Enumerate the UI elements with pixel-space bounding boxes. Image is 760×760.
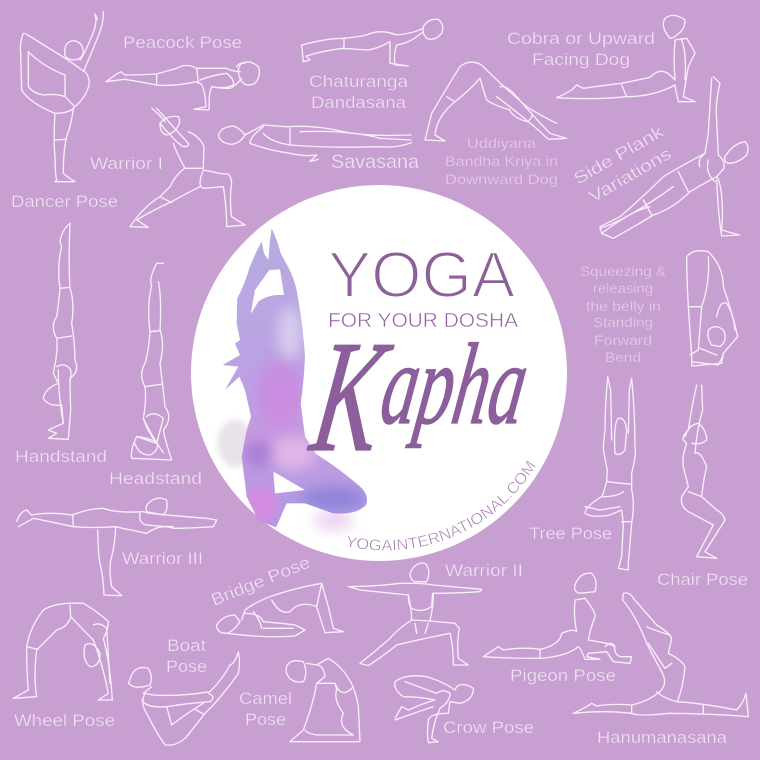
pose: peacock (106, 62, 259, 110)
pose: cobra (557, 15, 695, 102)
watercolor silhouette of seated yogi (218, 223, 373, 533)
pose: dancer (20, 12, 103, 182)
pose: hanumanasana (573, 593, 748, 717)
label: Crow Pose: Crow Pose (443, 718, 534, 737)
label: Pose (camel): Pose (245, 710, 286, 729)
label: Tree Pose: Tree Pose (529, 524, 612, 543)
label: Bridge Pose: Bridge Pose (208, 553, 313, 610)
label: Peacock Pose: Peacock Pose (123, 33, 242, 52)
script title: Kapha: K (301, 308, 401, 485)
central circle panel (191, 185, 567, 561)
label: Warrior II: Warrior II (445, 561, 523, 580)
label: Uddiyana: Uddiyana (467, 135, 536, 151)
pose: crow (395, 676, 473, 743)
label: Warrior III: Warrior III (122, 549, 203, 568)
pose: headstand (131, 263, 172, 460)
pose: standing forward bend (687, 251, 738, 366)
label: Chaturanga: Chaturanga (309, 72, 409, 91)
pose: boat (128, 652, 239, 745)
pose: bridge (217, 583, 343, 637)
pose: side plank (600, 77, 748, 238)
label: Handstand: Handstand (15, 447, 107, 466)
pose: chair (681, 385, 725, 558)
label: Headstand: Headstand (109, 469, 202, 488)
label: Cobra or Upward: Cobra or Upward (507, 29, 655, 48)
label: Savasana: Savasana (331, 152, 419, 173)
pose: wheel (13, 603, 112, 700)
label: Camel: Camel (239, 689, 292, 708)
pose: warrior II (348, 563, 482, 666)
pose: tree (585, 377, 635, 570)
label: Forward: Forward (594, 332, 652, 348)
label: releasing: releasing (593, 280, 653, 296)
label: Downward Dog: Downward Dog (445, 171, 558, 187)
pose: camel (286, 658, 360, 742)
pose: downward dog (425, 62, 567, 141)
label: Dancer Pose: Dancer Pose (11, 192, 118, 211)
label: Pose (boat): Pose (166, 657, 207, 676)
curved url: YOGAINTERNATIONAL.COM (348, 460, 536, 550)
pose: warrior III (17, 498, 217, 596)
label: Pigeon Pose: Pigeon Pose (510, 666, 616, 685)
label: Boat: Boat (167, 636, 206, 655)
label: Bandha Kriya in: Bandha Kriya in (445, 153, 558, 169)
script title: Kapha: apha (374, 321, 536, 449)
label: Warrior I: Warrior I (90, 154, 163, 173)
pose: chaturanga (302, 19, 443, 66)
pose: savasana (218, 125, 412, 162)
label: the belly in: the belly in (586, 298, 661, 314)
label: Bend: Bend (605, 349, 641, 365)
label: Variations: Variations (586, 144, 675, 206)
label: Side Plank: Side Plank (570, 122, 667, 188)
label: Chair Pose: Chair Pose (657, 570, 748, 589)
label: Facing Dog: Facing Dog (532, 50, 630, 69)
subtitle: for your dosha: FOR YOUR DOSHA (328, 310, 519, 332)
label: Standing: Standing (593, 314, 653, 330)
label: Dandasana: Dandasana (311, 93, 407, 112)
label: Squeezing &: Squeezing & (580, 263, 667, 279)
pose: handstand (43, 223, 77, 439)
pose: pigeon (483, 573, 632, 663)
pose: warrior I (130, 108, 245, 227)
title: YOGA: YOGA (328, 238, 516, 311)
label: Hanumanasana: Hanumanasana (597, 728, 728, 747)
label: Wheel Pose: Wheel Pose (14, 711, 115, 730)
